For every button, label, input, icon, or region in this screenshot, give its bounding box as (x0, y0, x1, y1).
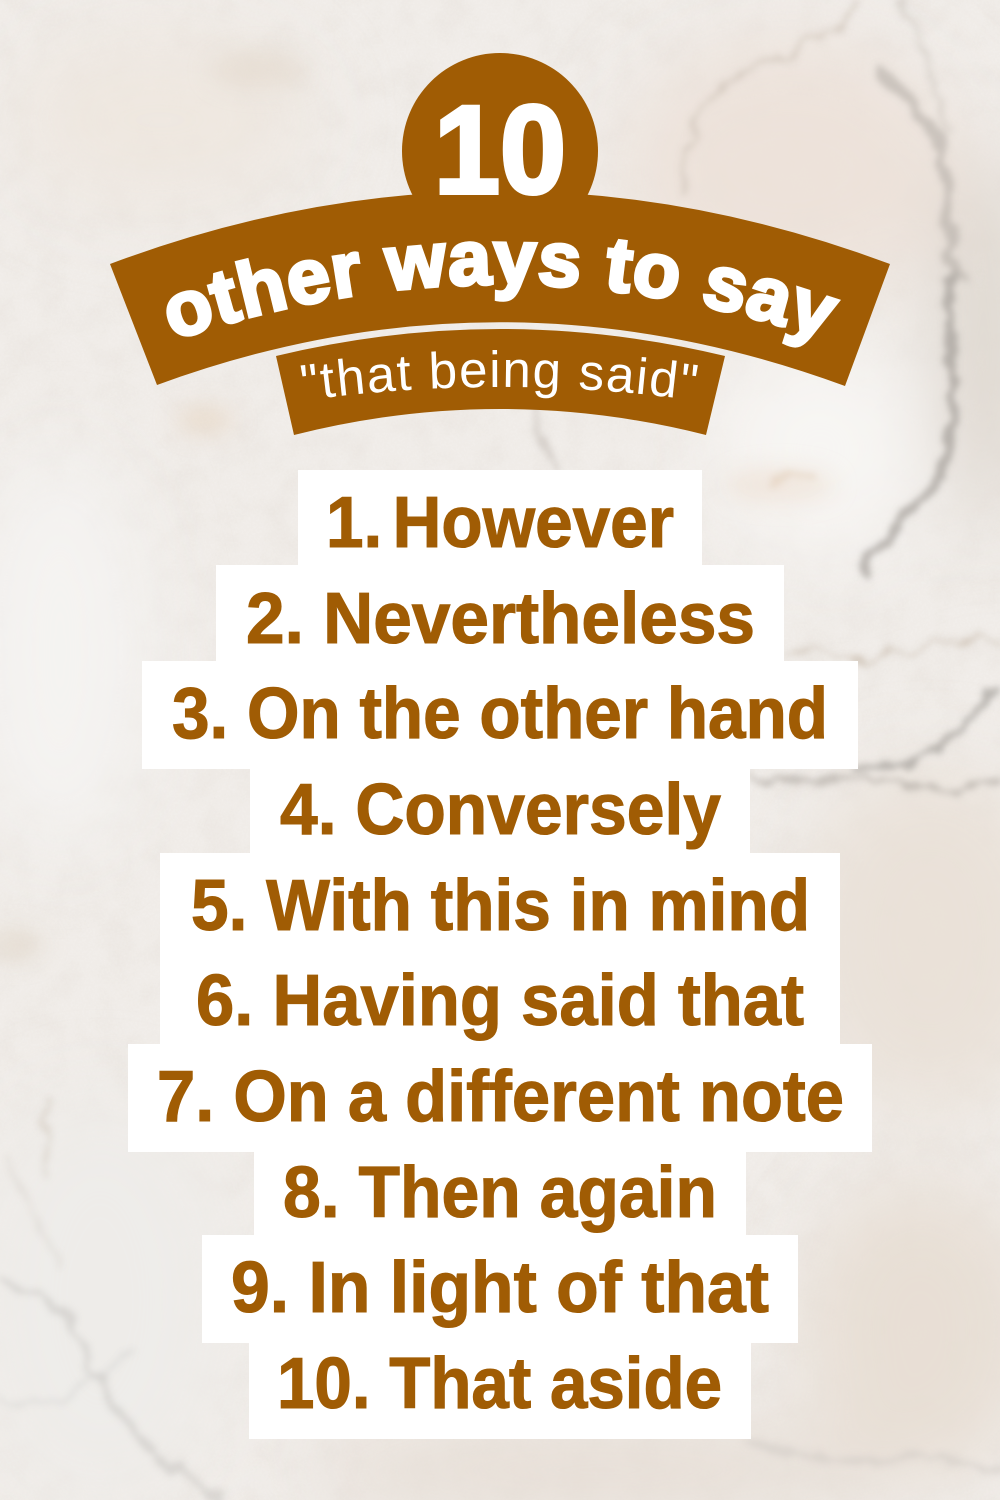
item 2: 2. Nevertheless (246, 579, 755, 659)
subheading: that being said: "that being said" (300, 350, 698, 398)
heading: other ways to say: other ways to say (166, 238, 841, 348)
item 7: 7. On a different note (157, 1057, 844, 1137)
item 5: 5. With this in mind (191, 866, 810, 946)
title badge (110, 53, 890, 435)
item 3: 3. On the other hand (172, 674, 828, 754)
number 10: 10 (434, 81, 566, 220)
item 6: 6. Having said that (196, 961, 804, 1041)
item 4: 4. Conversely (280, 770, 721, 850)
item 9: 9. In light of that (231, 1248, 769, 1328)
list of phrases (157, 483, 844, 1424)
circle badge (402, 53, 598, 249)
sub curved banner (276, 329, 725, 435)
main curved banner (110, 191, 890, 386)
item 1: 1. However (326, 483, 674, 563)
white list backing (128, 470, 872, 1439)
item 8: 8. Then again (283, 1153, 717, 1233)
item 10: 10. That aside (277, 1344, 722, 1424)
